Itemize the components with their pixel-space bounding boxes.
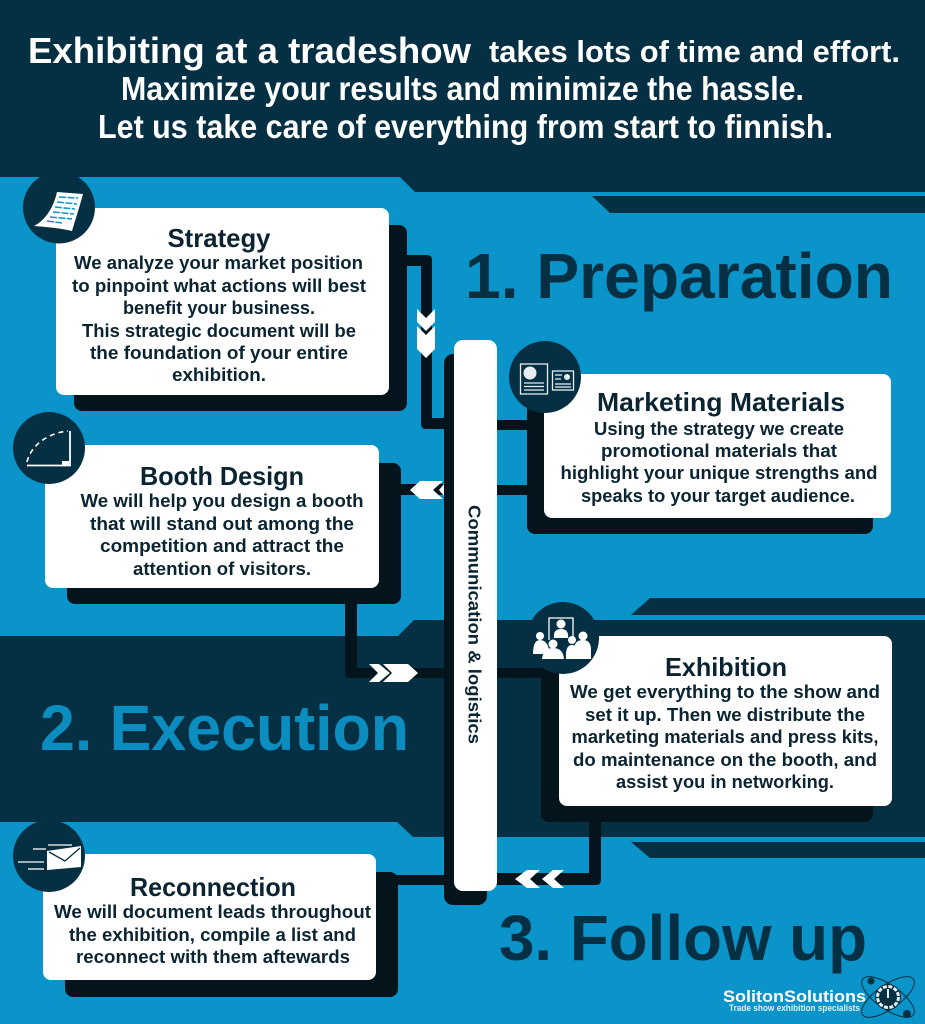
panel: reconnection: reconnect with them aftewards (76, 946, 350, 967)
icon: reconnection envelope (13, 820, 85, 892)
title: Exhibiting at a tradeshow (28, 30, 472, 71)
execution band (0, 598, 925, 858)
icon: marketing materials (509, 341, 581, 413)
panel: reconnection: We will document leads throughout (54, 901, 371, 922)
panel: booth design: Booth Design (140, 461, 304, 491)
title: Let us take care of everything from start to finnish. (98, 108, 833, 145)
panel: booth design: competition and attract the (100, 535, 344, 556)
title (28, 30, 900, 145)
panel: strategy: exhibition. (172, 364, 266, 385)
panel: exhibition: assist you in networking. (616, 771, 834, 792)
panel: marketing materials: promotional materials that (601, 440, 837, 461)
logo: Soliton Solutions (723, 969, 920, 1024)
panel: strategy: benefit your business. (123, 297, 315, 318)
logo: Soliton Solutions: Trade show exhibition specialists (729, 1003, 860, 1013)
panel: marketing materials: speaks to your target audience. (581, 485, 855, 506)
arrow: left chevrons to booth design (410, 481, 444, 499)
panel: reconnection: the exhibition, compile a list and (69, 924, 356, 945)
panel: booth design (45, 445, 401, 604)
panel: exhibition: do maintenance on the booth, and (573, 749, 877, 770)
panel: marketing materials: Using the strategy we create (594, 418, 844, 439)
panel: reconnection: Reconnection (130, 872, 296, 902)
title: Maximize your results and minimize the hassle. (121, 70, 804, 107)
panel: strategy: the foundation of your entire (90, 342, 348, 363)
panel: booth design: We will help you design a booth (80, 490, 364, 511)
panel: strategy: to pinpoint what actions will best (72, 275, 366, 296)
panel: strategy: This strategic document will be (82, 320, 356, 341)
header band (0, 0, 925, 213)
central bar: Communication & logistics (444, 340, 497, 905)
title: takes lots of time and effort. (489, 34, 900, 69)
panel: strategy: Strategy (168, 223, 271, 253)
panel: booth design: attention of visitors. (133, 558, 311, 579)
panel: reconnection (43, 854, 398, 997)
panel: exhibition: We get everything to the show and (570, 681, 880, 702)
panel: booth design: that will stand out among the (90, 513, 354, 534)
panel: exhibition (541, 636, 892, 822)
heading: 1. Preparation: 1. Preparation (465, 240, 893, 312)
panel: exhibition: marketing materials and press kits, (572, 726, 878, 747)
panel: marketing materials (527, 374, 891, 534)
panel: exhibition: Exhibition (665, 652, 787, 682)
arrow: right chevrons to execution (369, 664, 418, 682)
panel: strategy (56, 208, 407, 411)
arrow: left chevrons to follow up (515, 870, 564, 888)
icon: strategy document (23, 172, 95, 244)
logo: Soliton Solutions: SolitonSolutions (723, 987, 866, 1006)
panel: marketing materials: Marketing Materials (597, 387, 845, 417)
connector lines (345, 255, 601, 885)
arrow: down chevrons (417, 309, 435, 358)
icon: booth floor plan (13, 412, 85, 484)
central bar: Communication & logistics: Communication & logistics (464, 505, 484, 744)
heading: 2. Execution: 2. Execution (40, 692, 409, 764)
panel: strategy: We analyze your market position (74, 252, 363, 273)
icon: exhibition audience (527, 602, 599, 674)
heading: 3. Follow up: 3. Follow up (499, 902, 867, 974)
panel: marketing materials: highlight your unique strengths and (560, 462, 878, 483)
panel: exhibition: set it up. Then we distribute the (585, 704, 865, 725)
